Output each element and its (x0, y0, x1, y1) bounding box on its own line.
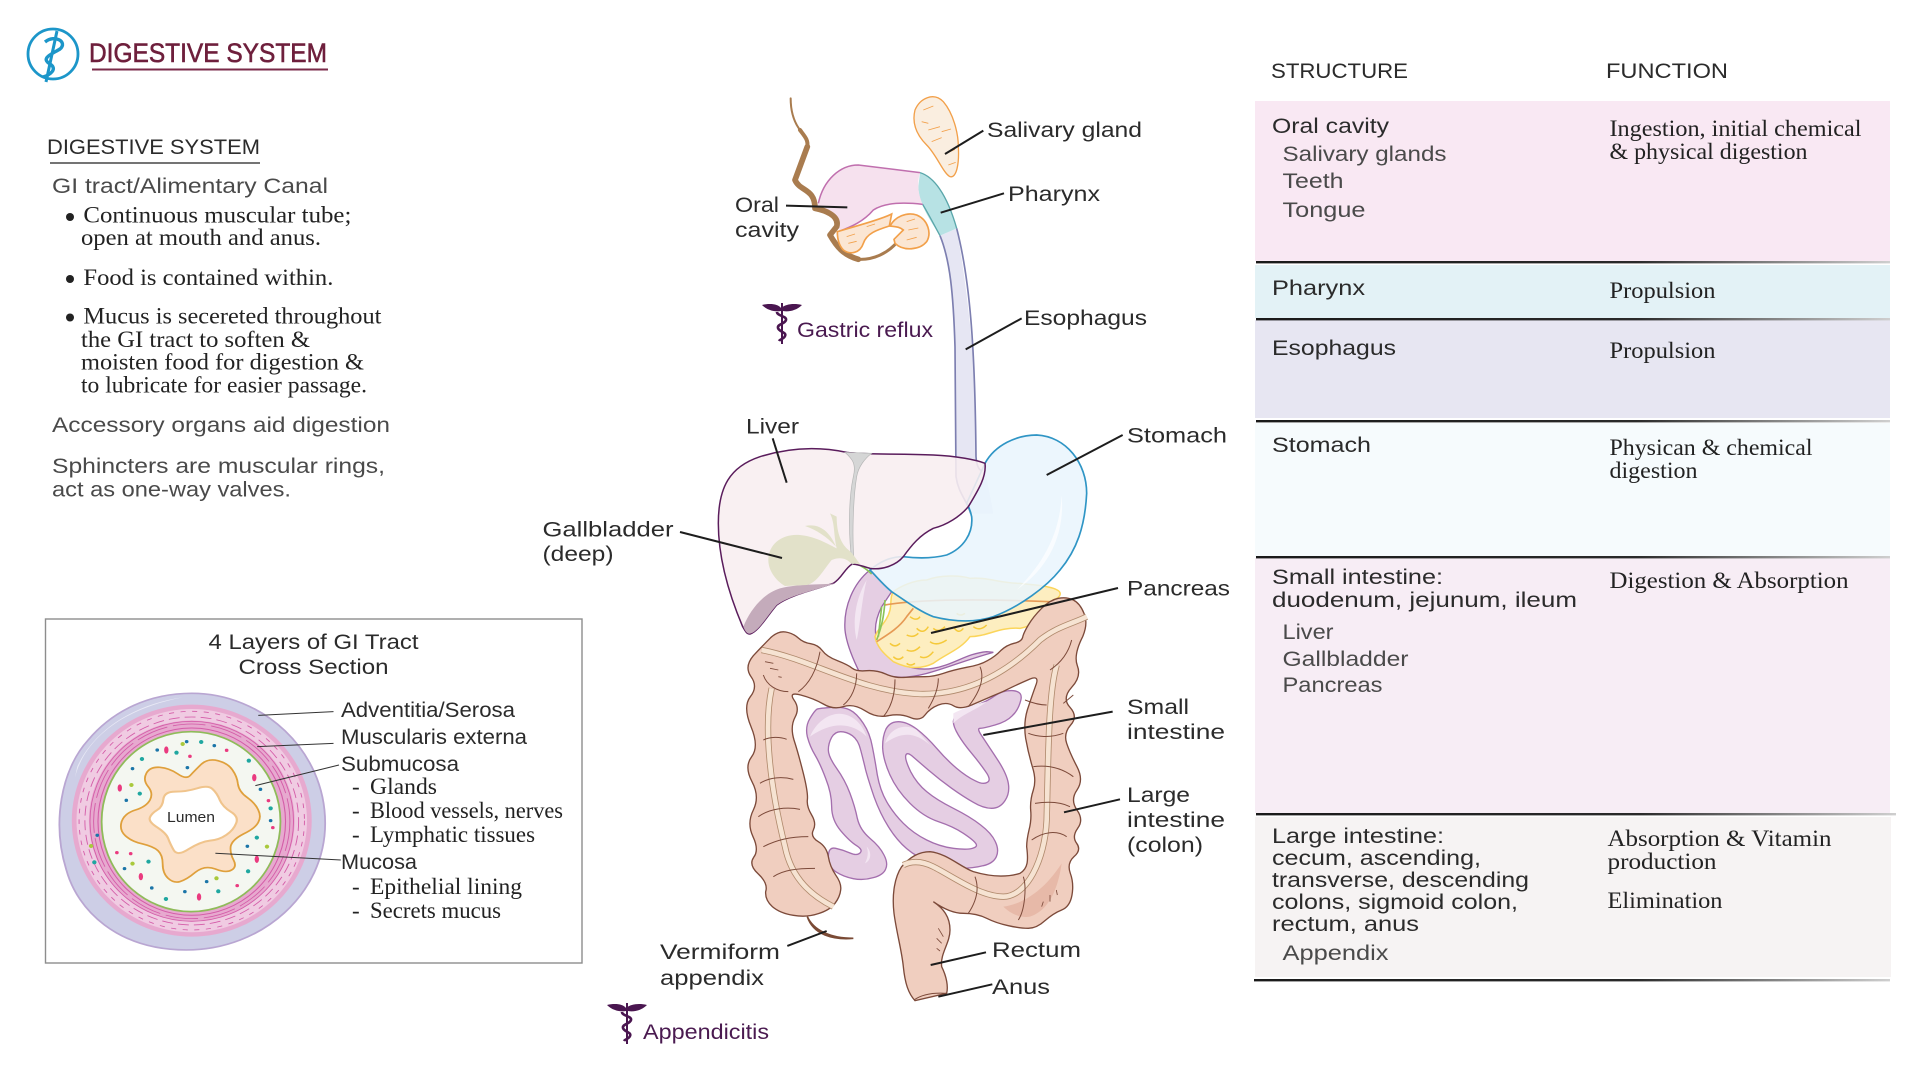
text block: digestive system overview: act as one-way valves. (52, 478, 291, 502)
label: gastric reflux: Gastric reflux (797, 319, 934, 342)
table row: stomach: digestion (1610, 458, 1698, 483)
table row: small intestine: Liver (1282, 621, 1334, 644)
layer labels: - (352, 874, 360, 899)
organ labels: Rectum (992, 939, 1081, 962)
organ labels: intestine (1127, 809, 1225, 832)
illustration: upper digestive tract (786, 97, 1022, 513)
table row: oral cavity: Salivary glands (1282, 143, 1446, 166)
text block: digestive system overview: Continuous muscular tube; (83, 202, 351, 228)
organ labels: appendix (660, 967, 765, 990)
gallbladder (768, 513, 860, 586)
layer labels: Glands (370, 774, 437, 799)
table row: small intestine: Gallbladder (1282, 648, 1408, 671)
label: appendicitis: Appendicitis (643, 1021, 769, 1044)
oral cavity edge (818, 165, 923, 232)
leader lines (787, 712, 1120, 997)
gland lobules (847, 219, 918, 243)
layer labels (341, 699, 563, 923)
table row: large intestine: production (1608, 849, 1717, 874)
salivary gland (914, 97, 959, 177)
organ labels (542, 119, 1230, 999)
panel heading (208, 631, 419, 679)
cross section diagram (59, 693, 341, 950)
text block: digestive system overview (47, 136, 390, 502)
organ labels: Vermiform (660, 941, 780, 964)
taenia bands (762, 617, 1087, 907)
illustration: large intestine (747, 598, 1120, 1001)
table row: stomach (1255, 423, 1890, 557)
table header: STRUCTURE (1271, 60, 1408, 83)
oral cavity (815, 165, 923, 232)
table row: stomach: Stomach (1272, 434, 1371, 457)
layer labels: Lymphatic tissues (370, 822, 535, 847)
organ labels: cavity (735, 219, 800, 242)
haustra lines (758, 640, 1073, 1000)
table row: large intestine: transverse, descending (1272, 869, 1529, 892)
layer labels: - (352, 774, 360, 799)
sigmoid shading (1003, 863, 1062, 917)
table row: esophagus: Esophagus (1272, 337, 1396, 360)
sublingual gland: left lobe (837, 214, 892, 253)
text block: digestive system overview: open at mouth and anus. (81, 225, 321, 250)
text block: digestive system overview: Mucus is secereted throughout (83, 304, 382, 328)
table row: large intestine: Large intestine: (1272, 825, 1444, 848)
table row: small intestine: Pancreas (1282, 674, 1382, 697)
pharynx (918, 173, 957, 236)
liver (718, 449, 985, 634)
text block: digestive system overview: Sphincters are muscular rings, (52, 455, 385, 478)
panel heading: 4 Layers of GI Tract (208, 631, 419, 654)
pharynx edge (920, 173, 957, 236)
text block: digestive system overview: DIGESTIVE SYSTEM (47, 136, 260, 159)
layer labels: Muscularis externa (341, 726, 527, 749)
table row: pharynx: Pharynx (1272, 277, 1366, 300)
leader lines (680, 435, 1123, 558)
organ labels: Small (1127, 696, 1189, 719)
colon outline (747, 598, 1086, 1001)
layer labels: Blood vessels, nerves (370, 798, 563, 823)
table row: oral cavity: Tongue (1282, 199, 1366, 222)
table row: esophagus (1255, 320, 1890, 418)
icon: caduceus appendicitis (607, 1003, 647, 1044)
organ labels: Oral (735, 194, 779, 217)
stomach (870, 435, 1087, 621)
table row: small intestine (1255, 558, 1890, 813)
label: lumen: Lumen (167, 809, 215, 826)
icon: caduceus gastric reflux (762, 303, 802, 344)
table row: oral cavity: & physical digestion (1610, 139, 1808, 164)
stomach highlight (1017, 495, 1062, 590)
layer labels: - (352, 898, 360, 923)
table row: oral cavity: Ingestion, initial chemical (1610, 116, 1862, 141)
organ labels: Liver (746, 416, 799, 438)
layer labels: - (352, 798, 360, 823)
title: DIGESTIVE SYSTEM (89, 38, 327, 68)
table row: oral cavity: Oral cavity (1272, 115, 1390, 138)
text block: digestive system overview: moisten food for digestion & (81, 350, 364, 374)
table row: pharynx (1255, 265, 1890, 318)
pancreas leader line (931, 588, 1118, 633)
jaw and lip outline (791, 98, 898, 259)
organ labels: Pharynx (1008, 183, 1101, 206)
table row: large intestine: cecum, ascending, (1272, 847, 1481, 870)
table row: small intestine: duodenum, jejunum, ileum (1272, 589, 1577, 612)
duodenum highlight (855, 580, 867, 640)
sublingual gland: right lobe (890, 214, 929, 249)
table row: large intestine (1255, 817, 1891, 977)
organ labels: (deep) (542, 543, 614, 566)
text block: digestive system overview: Accessory organs aid digestion (52, 414, 390, 437)
appendix (807, 917, 853, 939)
table row: small intestine: Small intestine: (1272, 566, 1443, 589)
illustration: duodenum, pancreas, stomach, liver (680, 435, 1123, 677)
layer labels: Submucosa (341, 753, 459, 776)
pancreas (857, 564, 1060, 668)
text block: digestive system overview: the GI tract to soften & (81, 327, 310, 352)
table row: oral cavity (1255, 101, 1890, 261)
layer labels: Epithelial lining (370, 874, 523, 899)
organ labels: (colon) (1127, 834, 1203, 857)
layer labels: - (352, 822, 360, 847)
table row: stomach: Physican & chemical (1610, 435, 1812, 460)
layer labels: Secrets mucus (370, 898, 501, 923)
table row: oral cavity: Teeth (1282, 170, 1344, 193)
table row: large intestine: colons, sigmoid colon, (1272, 891, 1518, 914)
falciform ligament (845, 452, 872, 564)
table row: small intestine: Digestion & Absorption (1610, 568, 1849, 593)
table row: pharynx: Propulsion (1610, 278, 1716, 303)
organ labels: Anus (992, 976, 1050, 999)
text block: digestive system overview: to lubricate for easier passage. (81, 372, 367, 398)
esophagus edges (940, 228, 985, 513)
illustration: small intestine (807, 691, 1021, 879)
esophagus (940, 228, 993, 513)
duodenum (845, 570, 993, 677)
table row: large intestine: rectum, anus (1272, 913, 1419, 936)
text block: digestive system overview: Food is contained within. (83, 265, 333, 290)
text block: digestive system overview: GI tract/Alimentary Canal (52, 175, 328, 198)
table row: large intestine: Elimination (1608, 888, 1723, 913)
organ labels: intestine (1127, 721, 1225, 744)
table row: large intestine: Appendix (1282, 942, 1389, 965)
organ labels: Salivary gland (987, 119, 1142, 142)
liver underside (743, 583, 835, 634)
organ labels: Pancreas (1127, 578, 1230, 600)
panel heading: Cross Section (238, 656, 388, 679)
table header (1271, 60, 1728, 83)
layer labels: Mucosa (341, 851, 417, 874)
logo: caduceus in circle (28, 29, 78, 82)
organ labels: Large (1127, 784, 1190, 807)
table header: FUNCTION (1606, 60, 1728, 83)
organ labels: Gallbladder (542, 518, 674, 542)
leader lines (786, 131, 1022, 349)
table row: large intestine: Absorption & Vitamin (1608, 826, 1832, 851)
organ labels: Esophagus (1024, 307, 1147, 330)
panel: 4 layers of GI tract cross section (46, 619, 582, 963)
layer labels: Adventitia/Serosa (341, 699, 515, 722)
organ labels: Stomach (1127, 424, 1227, 448)
table row: esophagus: Propulsion (1610, 338, 1716, 363)
